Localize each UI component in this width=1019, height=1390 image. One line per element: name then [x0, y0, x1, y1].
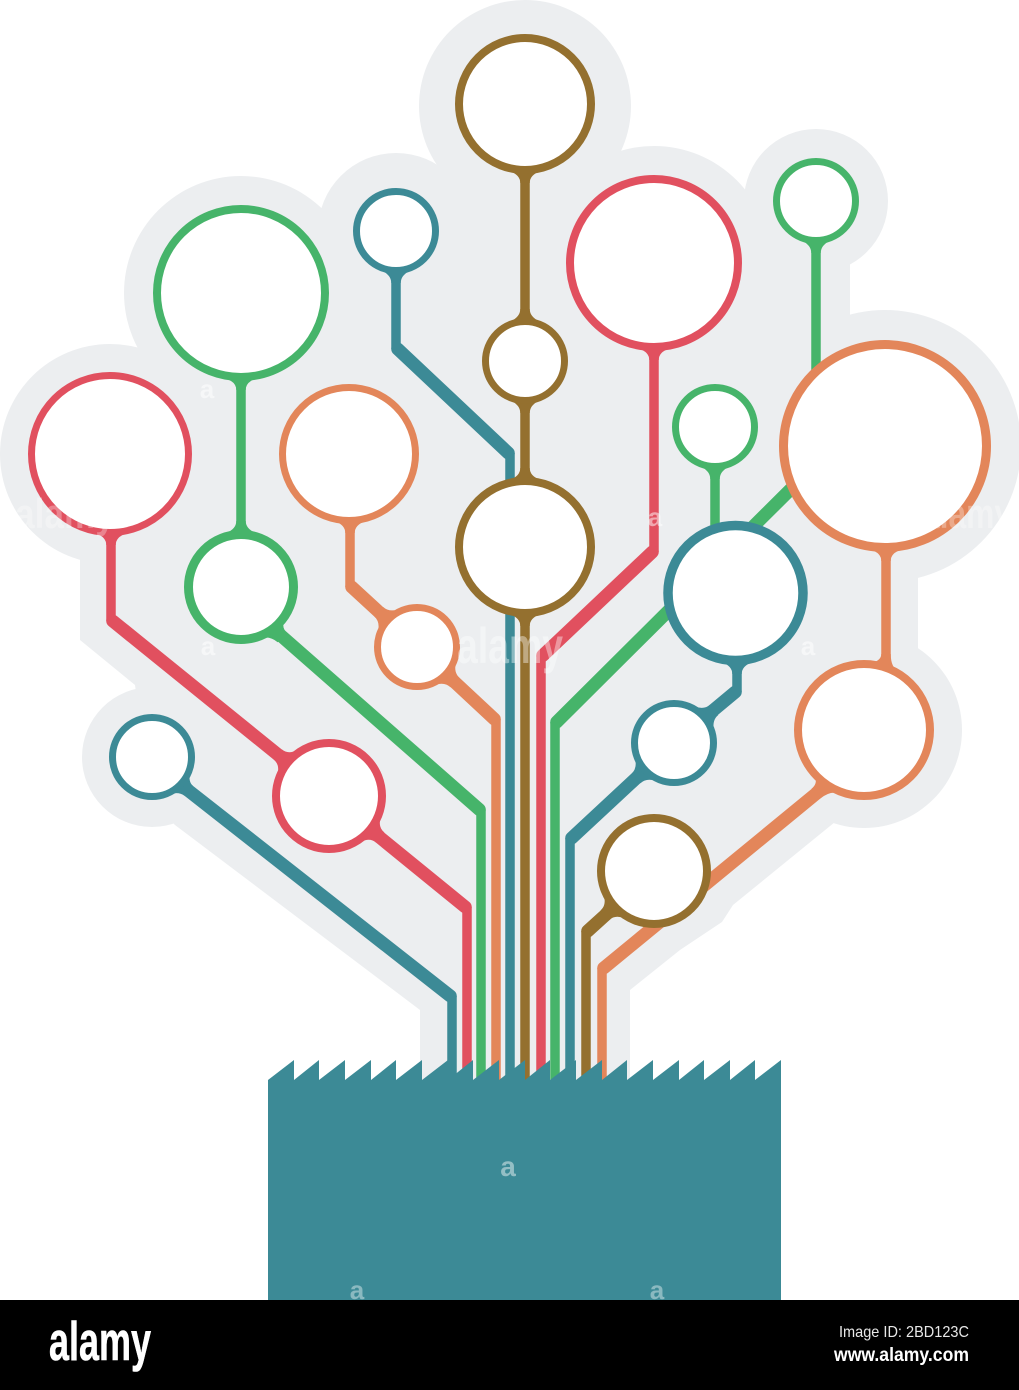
watermarks: alamy — [15, 490, 116, 537]
node: brown middle — [459, 481, 591, 613]
watermarks: a — [648, 502, 663, 532]
logo: alamy — [49, 1310, 151, 1372]
watermarks: a — [350, 1275, 365, 1305]
node: teal left — [112, 718, 192, 796]
branch: red left — [111, 454, 467, 1085]
tree halo silhouette — [0, 0, 1019, 1080]
node: green small centre — [676, 388, 754, 466]
branch: teal top — [396, 231, 510, 1085]
sawtooth base — [268, 1060, 781, 1300]
node: green large — [157, 209, 325, 377]
branch: red right — [541, 263, 654, 1085]
node: brown lower right — [601, 818, 707, 924]
branch: teal right — [570, 593, 737, 1085]
watermarks: a — [801, 631, 816, 661]
watermarks — [15, 374, 1012, 1305]
branch: green left — [241, 293, 481, 1085]
branch: green right — [555, 470, 810, 1085]
branch: brown right — [586, 871, 654, 1085]
node: orange lower right — [798, 664, 930, 796]
branch: green short — [710, 427, 720, 560]
image id: Image ID: 2BD123C — [839, 1324, 969, 1341]
branch: teal left — [152, 762, 452, 1085]
watermarks: a — [200, 374, 215, 404]
node: red right — [570, 179, 738, 347]
node: brown top — [459, 38, 591, 170]
node: green lower — [188, 534, 294, 640]
node: orange middle — [282, 388, 416, 520]
node: orange small — [378, 608, 456, 686]
node: red lower — [276, 743, 382, 849]
branch: orange left — [350, 454, 496, 1085]
node: orange large — [784, 344, 986, 548]
branch: green top right — [811, 201, 821, 400]
connector lines — [111, 104, 886, 1085]
footer bar — [0, 1300, 1019, 1390]
node: teal small top — [356, 192, 436, 270]
node: red left — [32, 376, 188, 532]
watermarks: a — [650, 1275, 665, 1305]
node: teal small right — [634, 704, 714, 782]
node: teal large — [668, 526, 803, 660]
watermarks: a — [500, 1151, 516, 1182]
website: www.alamy.com — [833, 1345, 969, 1366]
node: green small top right — [776, 162, 856, 240]
nodes — [32, 38, 986, 924]
junction flares — [96, 171, 901, 926]
node: brown small — [486, 322, 564, 400]
watermarks: alamy — [457, 618, 563, 674]
watermarks: a — [201, 631, 216, 661]
branch: orange right — [602, 446, 886, 1085]
branch: brown centre — [520, 104, 530, 1085]
